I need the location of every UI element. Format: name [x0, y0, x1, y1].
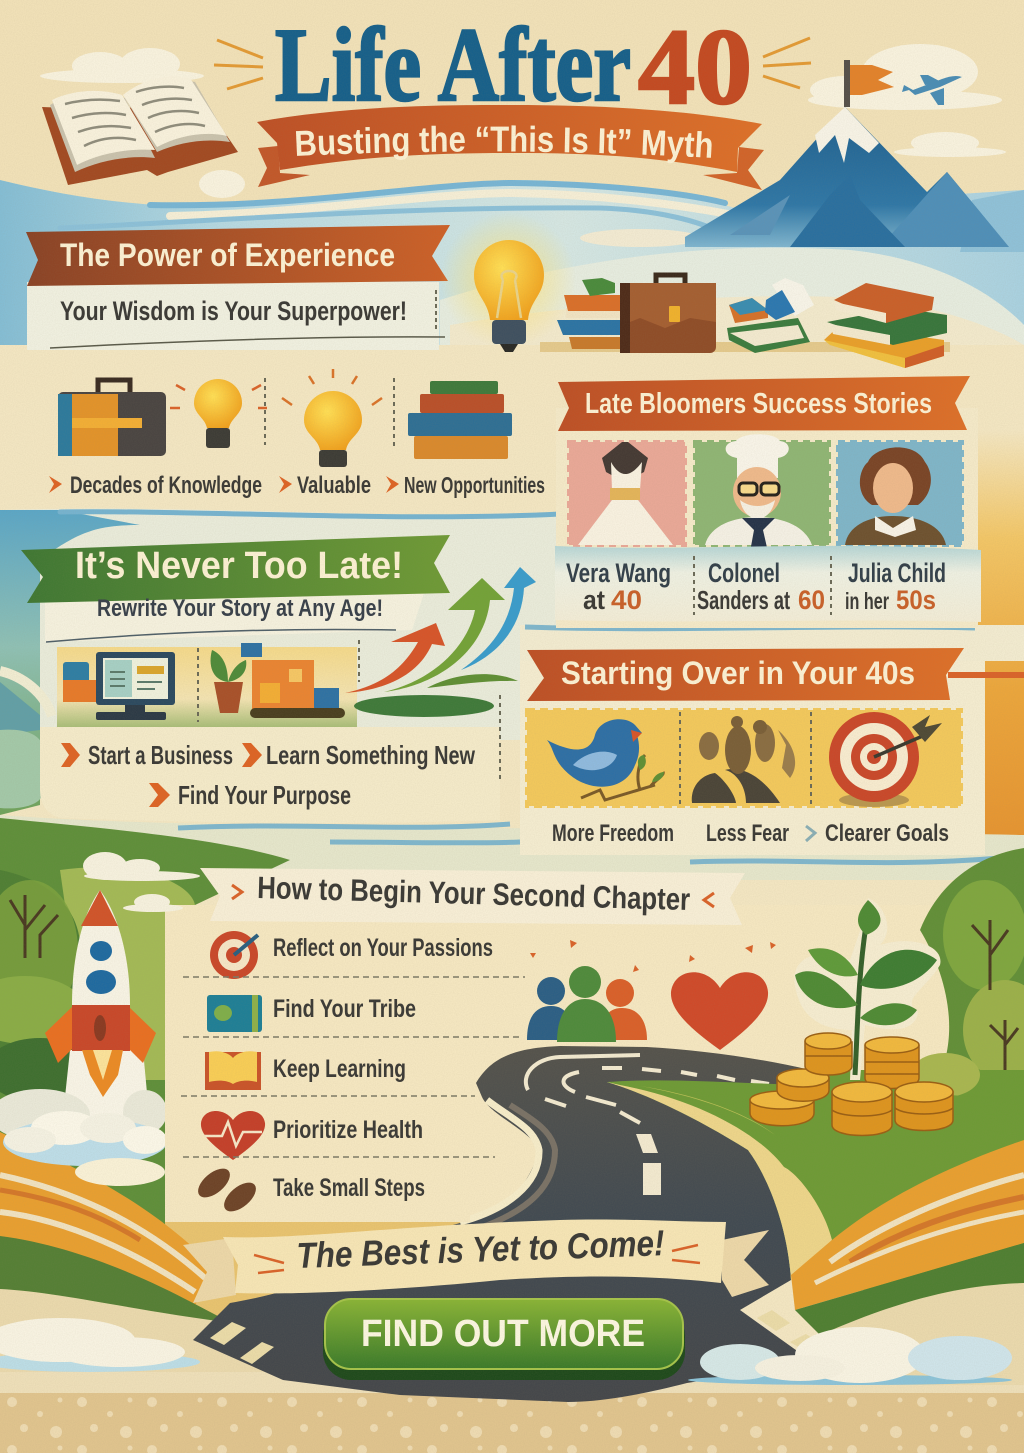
button: find out more: FIND OUT MORE: [361, 1313, 645, 1355]
icon: open book: [42, 76, 238, 185]
island: green lawn: [607, 1080, 1024, 1280]
panel backing: [520, 661, 985, 855]
item: find your tribe: [207, 995, 416, 1032]
item: prioritize health: [201, 1111, 423, 1160]
illustration: tree left: [10, 895, 58, 958]
label: Julia Child: 50s: [896, 585, 936, 615]
icon: rocket: [45, 890, 156, 1125]
icon: valuable bulb: [282, 369, 382, 467]
icon: mountain with flag: [685, 60, 1024, 252]
panel: starting over in your 40s: [520, 648, 1024, 855]
title: 40: [638, 8, 752, 127]
icon: small bulb: [170, 379, 267, 448]
icon: community group: [527, 966, 647, 1042]
subtitle ribbon: [257, 105, 764, 190]
banner: the best is yet to come: The Best is Yet to Come!: [296, 1222, 665, 1276]
heading text: Late Bloomers Success Stories: [585, 388, 932, 420]
label: Vera Wang: 40: [611, 585, 642, 615]
banner: the best is yet to come: [183, 1219, 769, 1303]
item: take small steps: Take Small Steps: [273, 1174, 425, 1202]
label: find your purpose: [149, 780, 351, 810]
label: learn something new: Learn Something New: [266, 740, 476, 770]
panel background: [27, 282, 439, 350]
label: decades of knowledge: Decades of Knowledge: [70, 472, 262, 499]
panel: key strengths: [49, 369, 545, 499]
illustration: tree right: [972, 920, 1018, 1070]
portrait: Julia Child: [838, 442, 962, 545]
icon: large light bulb: [440, 212, 576, 352]
lower panel: [40, 727, 500, 823]
icon: plant and parcels: [211, 643, 345, 718]
icon: small book pile: [727, 278, 814, 353]
label: new opportunities: [386, 472, 545, 498]
label: Vera Wang: [566, 558, 671, 615]
panel: how to begin your second chapter: [165, 868, 745, 1222]
heading ribbon: [527, 648, 964, 701]
label: less fear: Less Fear: [706, 820, 789, 847]
heading text: It’s Never Too Late!: [75, 545, 403, 587]
icon: books: [408, 381, 512, 459]
road: [193, 1046, 824, 1402]
tagline panel: [45, 590, 425, 642]
tagline: Your Wisdom is Your Superpower!: [60, 296, 407, 326]
label: Julia Child: Julia Child: [848, 558, 946, 588]
icon: heart: [530, 940, 776, 1050]
heading ribbon: [26, 225, 450, 286]
label: Colonel Sanders: Sanders at: [697, 585, 790, 615]
label: Julia Child: [845, 558, 946, 615]
heading ribbon: [558, 376, 970, 431]
heading text: The Power of Experience: [60, 237, 395, 273]
item: keep learning: Keep Learning: [273, 1055, 406, 1083]
table surface: [540, 342, 950, 352]
icon: stacked books and briefcase: [557, 275, 716, 353]
item: keep learning: [205, 1051, 406, 1090]
subtitle ribbon: Busting the “This Is It” Myth: [296, 125, 712, 164]
icon: briefcase: [58, 380, 166, 456]
panel: it's never too late: [21, 535, 536, 823]
heading text: Starting Over in Your 40s: [561, 655, 915, 691]
icon: footprints: [692, 716, 795, 803]
label: new opportunities: New Opportunities: [404, 472, 545, 498]
label: decades of knowledge: [49, 472, 262, 499]
label: valuable: [279, 472, 371, 499]
tagline: Rewrite Your Story at Any Age!: [97, 595, 383, 622]
clouds: top: [40, 44, 1006, 247]
panel: the power of experience: [26, 225, 450, 350]
title: Life After: [275, 6, 631, 123]
names panel: [555, 546, 981, 622]
label: Colonel Sanders: Colonel: [708, 558, 780, 588]
item: reflect on your passions: [210, 931, 493, 979]
portrait: Vera Wang: [569, 442, 685, 545]
label: Vera Wang: Vera Wang: [566, 558, 671, 588]
icon strip background: [57, 647, 357, 727]
heading banner: [200, 868, 745, 925]
label: start a business: Start a Business: [88, 740, 233, 770]
item: reflect on your passions: Reflect on Your Passions: [273, 934, 493, 962]
icon strip background: [527, 710, 961, 806]
arrows: rising growth: [345, 567, 536, 717]
heading ribbon: [21, 535, 450, 603]
label: find your purpose: Find Your Purpose: [178, 780, 351, 810]
label: valuable: Valuable: [297, 472, 371, 499]
item: find your tribe: Find Your Tribe: [273, 995, 416, 1023]
icon: bluebird: [547, 719, 664, 800]
clouds: rocket smoke: [0, 1089, 167, 1186]
label: clearer goals: Clearer Goals: [825, 820, 949, 847]
icon: tall book stack: [824, 283, 947, 368]
button: find out more: [323, 1299, 685, 1380]
label: Julia Child: in her: [845, 588, 889, 614]
panel background: [165, 925, 470, 1222]
item: take small steps: [193, 1163, 425, 1217]
label: Colonel Sanders: 60: [798, 585, 825, 615]
panel: late bloomers success stories: [555, 376, 981, 628]
icon: target with arrow: [829, 712, 942, 807]
icon: plant: [794, 898, 940, 1080]
label: Colonel Sanders: [697, 558, 825, 615]
icon: airplane: [902, 75, 962, 105]
bands: right orange ribbons: [791, 1140, 1024, 1385]
item: prioritize health: Prioritize Health: [273, 1116, 423, 1144]
label: more freedom: More Freedom: [552, 820, 674, 847]
heading text: How to Begin Your Second Chapter: [257, 870, 691, 917]
clouds: beside rocket: [83, 852, 200, 912]
icon: computer desk: [63, 652, 175, 720]
portrait: Colonel Sanders: [695, 434, 829, 552]
label: start a business: [61, 740, 233, 770]
label: Vera Wang: at: [583, 585, 605, 615]
clouds: bottom: [0, 1318, 1012, 1385]
icon: coin stacks: [750, 1033, 953, 1136]
